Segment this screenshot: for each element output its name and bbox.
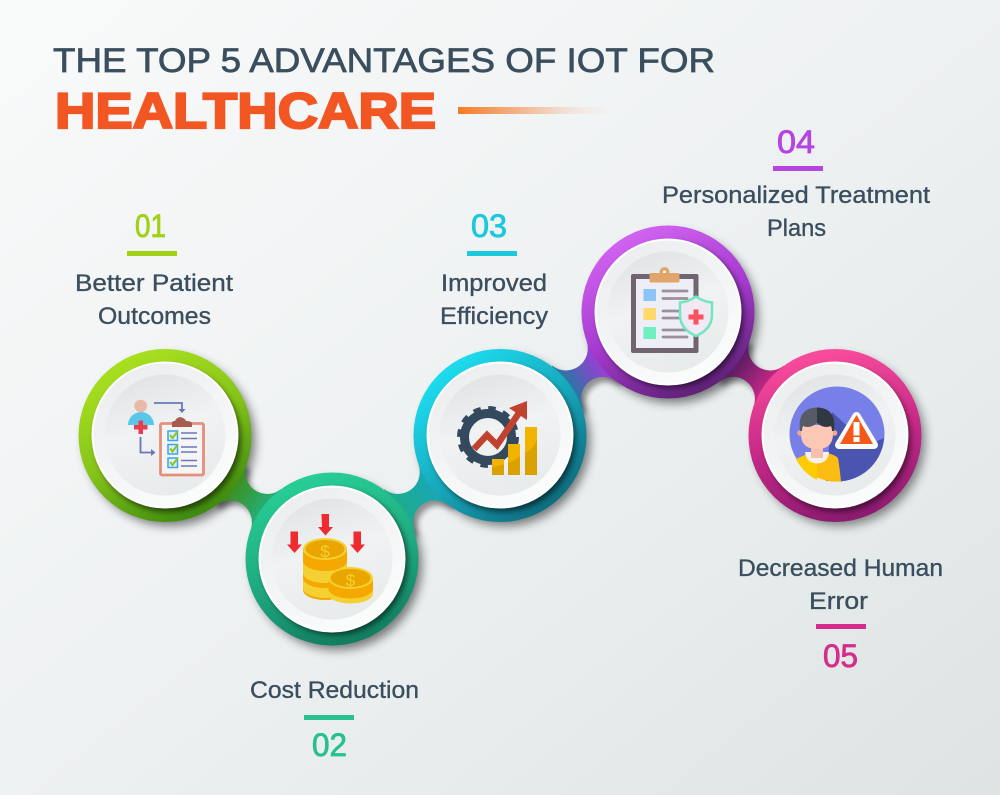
accent bar 03 bbox=[467, 251, 517, 256]
icon: gear with growth chart bbox=[460, 401, 537, 475]
ring 5 bbox=[748, 349, 922, 522]
accent bar 02 bbox=[304, 715, 354, 720]
label: improved efficiency: Efficiency bbox=[440, 303, 548, 330]
number 02: 02 bbox=[312, 727, 347, 763]
ring 1 bbox=[78, 349, 252, 522]
number 01: 01 bbox=[135, 208, 166, 244]
connected rings bbox=[78, 226, 922, 646]
cast shadows of connected circles bbox=[85, 233, 925, 650]
connector 3 to 4 bbox=[500, 312, 668, 436]
title line 2: healthcare: HEALTHCARE bbox=[55, 83, 436, 139]
item 05 bbox=[738, 555, 943, 674]
icon: falling coin stacks: $ bbox=[320, 542, 330, 561]
connector 4 to 5 bbox=[668, 312, 835, 436]
number 04: 04 bbox=[777, 124, 815, 160]
icon: clipboard with shield bbox=[631, 267, 712, 353]
label: improved efficiency: Improved bbox=[441, 270, 547, 297]
number 03: 03 bbox=[471, 208, 507, 244]
number 05: 05 bbox=[823, 638, 858, 674]
item 04 bbox=[662, 124, 930, 242]
item 02 bbox=[250, 677, 419, 763]
title bbox=[53, 42, 715, 139]
item 01 bbox=[75, 208, 233, 330]
ring 2 bbox=[246, 472, 418, 646]
label: better patient outcomes: Outcomes bbox=[98, 303, 211, 330]
connector 1 to 2 bbox=[165, 436, 332, 559]
accent bar 05 bbox=[816, 624, 866, 629]
ring 4 bbox=[582, 226, 754, 398]
item 03 bbox=[440, 208, 548, 330]
label: decreased human error: Error bbox=[809, 588, 868, 615]
plate 5 bbox=[762, 362, 911, 512]
accent bar 01 bbox=[127, 251, 177, 256]
plate 3 bbox=[426, 362, 576, 512]
title accent line bbox=[458, 107, 618, 114]
accent bar 04 bbox=[773, 166, 823, 171]
title line 1: THE TOP 5 ADVANTAGES OF IOT FOR bbox=[53, 42, 715, 80]
connector 2 to 3 bbox=[332, 436, 500, 559]
plate 4 bbox=[594, 238, 744, 388]
icon: falling coin stacks: $ bbox=[346, 571, 356, 590]
plate 2 bbox=[258, 486, 408, 635]
plate 1 bbox=[92, 362, 241, 512]
label: better patient outcomes: Better Patient bbox=[75, 270, 233, 297]
icon: patient checklist bbox=[128, 400, 204, 475]
ring 3 bbox=[414, 349, 586, 522]
label: personalized treatment plans: Plans bbox=[767, 215, 826, 242]
label: cost reduction: Cost Reduction bbox=[250, 677, 419, 704]
label: decreased human error: Decreased Human bbox=[738, 555, 943, 582]
icon: falling coin stacks bbox=[287, 514, 373, 604]
icon: person with warning bbox=[790, 386, 884, 482]
label: personalized treatment plans: Personalized Treatment bbox=[662, 182, 930, 209]
